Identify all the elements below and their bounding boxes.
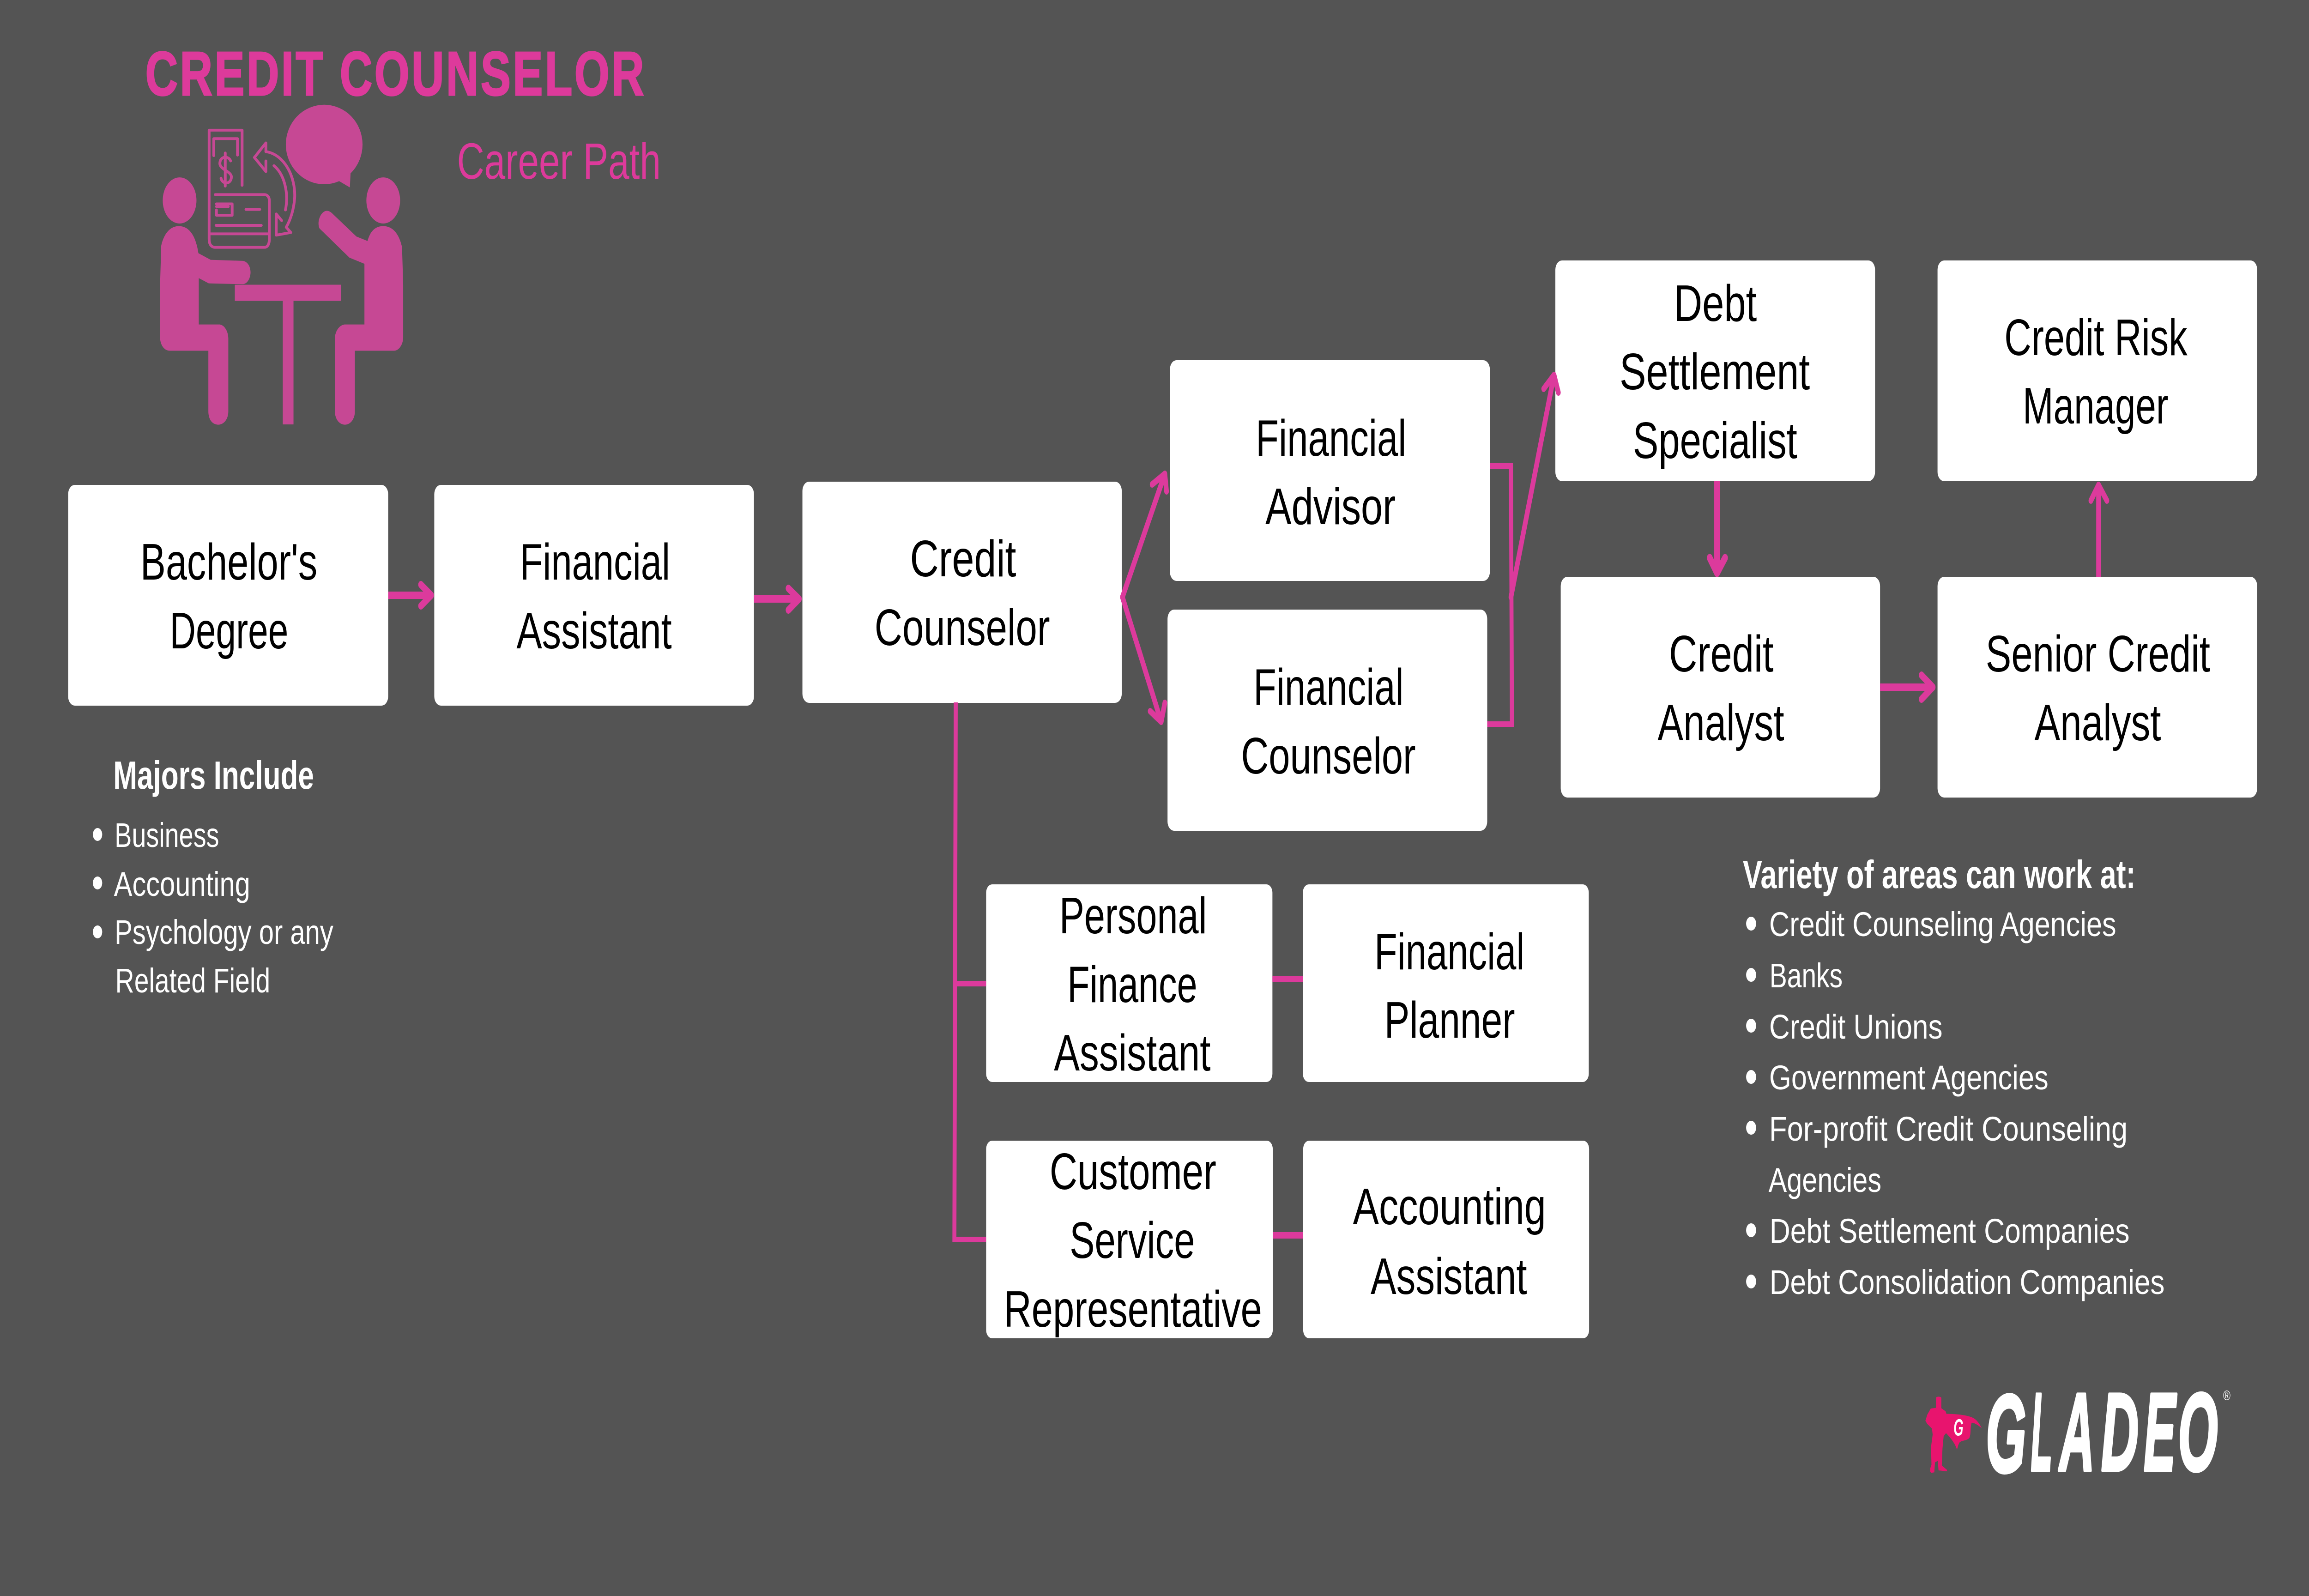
arrow: bracket to Debt Settlement Specialist xyxy=(1511,375,1559,597)
logo wordmark: G xyxy=(1986,1372,2026,1496)
panel: Financial Counselor: Counselor xyxy=(1241,727,1416,785)
panel: Senior Credit Analyst xyxy=(1938,577,2257,798)
panel: Customer Service Representative: Representative xyxy=(1004,1280,1262,1338)
logo wordmark: A xyxy=(2058,1370,2095,1494)
panel: Credit Analyst xyxy=(1561,577,1880,798)
panel: Bachelor's Degree: Bachelor's xyxy=(140,533,317,591)
panel: Financial Advisor xyxy=(1170,360,1490,581)
panel: Accounting Assistant: Accounting xyxy=(1353,1178,1546,1235)
panel: Senior Credit Analyst: Senior Credit xyxy=(1986,625,2210,683)
text block: variety of areas: Banks xyxy=(1770,957,1843,995)
panel: Financial Planner: Financial xyxy=(1374,923,1525,980)
logo: Gladeo xyxy=(1925,1370,2230,1496)
panel: Debt Settlement Specialist: Settlement xyxy=(1620,343,1810,400)
connector: advisor and counselor bracket xyxy=(1487,466,1512,724)
icon: right person xyxy=(319,177,403,425)
connector: Credit Counselor branches xyxy=(955,702,986,1239)
arrow: Credit Counselor to Financial Advisor xyxy=(1123,474,1167,597)
arrow: Credit Analyst to Senior Credit Analyst xyxy=(1880,675,1933,699)
panel: Credit Risk Manager xyxy=(1938,260,2257,481)
arrow: Bachelor's Degree to Financial Assistant xyxy=(388,585,431,606)
panel: Accounting Assistant xyxy=(1303,1141,1589,1338)
text block: majors include: Related Field xyxy=(115,962,270,1000)
icon: phone and credit card exchange xyxy=(209,130,295,248)
panel: Credit Analyst: Analyst xyxy=(1657,694,1784,751)
text block: majors include: Business xyxy=(115,816,219,854)
text block: variety of areas: Agencies xyxy=(1769,1161,1881,1199)
panel: Credit Counselor xyxy=(803,482,1122,703)
text block: variety of areas: Credit Unions xyxy=(1769,1008,1942,1046)
logo wordmark: E xyxy=(2144,1370,2177,1494)
logo wordmark xyxy=(1986,1370,2218,1496)
text block: majors include xyxy=(93,753,334,1000)
arrow: Senior Credit Analyst to Credit Risk Manager xyxy=(2091,485,2107,577)
panel: Accounting Assistant: Assistant xyxy=(1371,1247,1527,1305)
text block: variety of areas: Government Agencies xyxy=(1769,1059,2049,1097)
text block: variety of areas: Variety of areas can work at: xyxy=(1743,852,2136,896)
icon: table xyxy=(235,285,341,424)
logo wordmark: D xyxy=(2101,1370,2139,1494)
logo registered mark: ® xyxy=(2223,1387,2230,1403)
panel: Financial Counselor xyxy=(1167,610,1487,831)
icon: left person xyxy=(160,177,251,425)
text block: variety of areas: For-profit Credit Counseling xyxy=(1769,1110,2128,1148)
panel: Debt Settlement Specialist: Debt xyxy=(1674,274,1757,332)
panel: Credit Counselor: Credit xyxy=(910,530,1016,587)
panel: Financial Planner: Planner xyxy=(1384,991,1515,1049)
panel: Financial Planner xyxy=(1303,884,1589,1082)
panel: Personal Finance Assistant: Finance xyxy=(1067,955,1197,1013)
panel: Financial Advisor: Advisor xyxy=(1265,478,1396,535)
panel: Debt Settlement Specialist: Specialist xyxy=(1633,411,1797,469)
title: CREDIT COUNSELOR xyxy=(145,38,644,109)
connector: Personal Finance Assistant to Financial Planner xyxy=(1272,976,1303,982)
text block: majors include: Psychology or any xyxy=(115,913,334,951)
panel: Credit Risk Manager: Credit Risk xyxy=(2004,308,2188,366)
panel: Bachelor's Degree xyxy=(68,485,388,706)
icon: caped hero xyxy=(1925,1396,1982,1473)
icon: speech bubble xyxy=(286,105,363,187)
text block: majors include: Accounting xyxy=(114,865,250,903)
panel: Personal Finance Assistant: Personal xyxy=(1059,887,1207,944)
panel: Bachelor's Degree: Degree xyxy=(169,602,288,659)
text block: majors include: Majors Include xyxy=(113,753,314,797)
connector: Customer Service Representative to Accounting Assistant xyxy=(1273,1232,1303,1239)
panel: Customer Service Representative xyxy=(986,1141,1273,1338)
panel: Credit Counselor: Counselor xyxy=(875,598,1050,656)
panel: Financial Assistant: Assistant xyxy=(516,602,672,659)
panel: Financial Assistant: Financial xyxy=(520,533,670,591)
panel: Senior Credit Analyst: Analyst xyxy=(2034,694,2161,751)
panel: Financial Assistant xyxy=(434,485,754,706)
arrow: Debt Settlement Specialist to Credit Analyst xyxy=(1710,481,1725,573)
panel: Personal Finance Assistant xyxy=(986,884,1272,1082)
text block: variety of areas xyxy=(1743,852,2165,1301)
panel: Financial Advisor: Financial xyxy=(1256,409,1406,467)
panel: Customer Service Representative: Customer xyxy=(1050,1143,1216,1200)
arrow: Credit Counselor to Financial Counselor xyxy=(1123,597,1165,722)
panel: Debt Settlement Specialist xyxy=(1555,260,1875,481)
panel: Credit Analyst: Credit xyxy=(1669,625,1773,683)
text block: variety of areas: Debt Consolidation Companies xyxy=(1770,1264,2165,1301)
text block: variety of areas: Debt Settlement Companies xyxy=(1770,1212,2130,1250)
subtitle: career path: Career Path xyxy=(457,133,661,190)
panel: Financial Counselor: Financial xyxy=(1253,658,1404,716)
text block: variety of areas: Credit Counseling Agencies xyxy=(1769,906,2116,943)
icon: two people at a table discussing credit xyxy=(160,105,403,425)
panel: Credit Risk Manager: Manager xyxy=(2023,377,2168,435)
logo wordmark: L xyxy=(2031,1370,2052,1494)
icon: caped hero: G xyxy=(1953,1415,1964,1441)
arrow: Financial Assistant to Credit Counselor xyxy=(754,588,799,610)
panel: Customer Service Representative: Service xyxy=(1070,1211,1195,1269)
panel: Personal Finance Assistant: Assistant xyxy=(1054,1024,1211,1082)
text: O xyxy=(2178,1370,2218,1494)
